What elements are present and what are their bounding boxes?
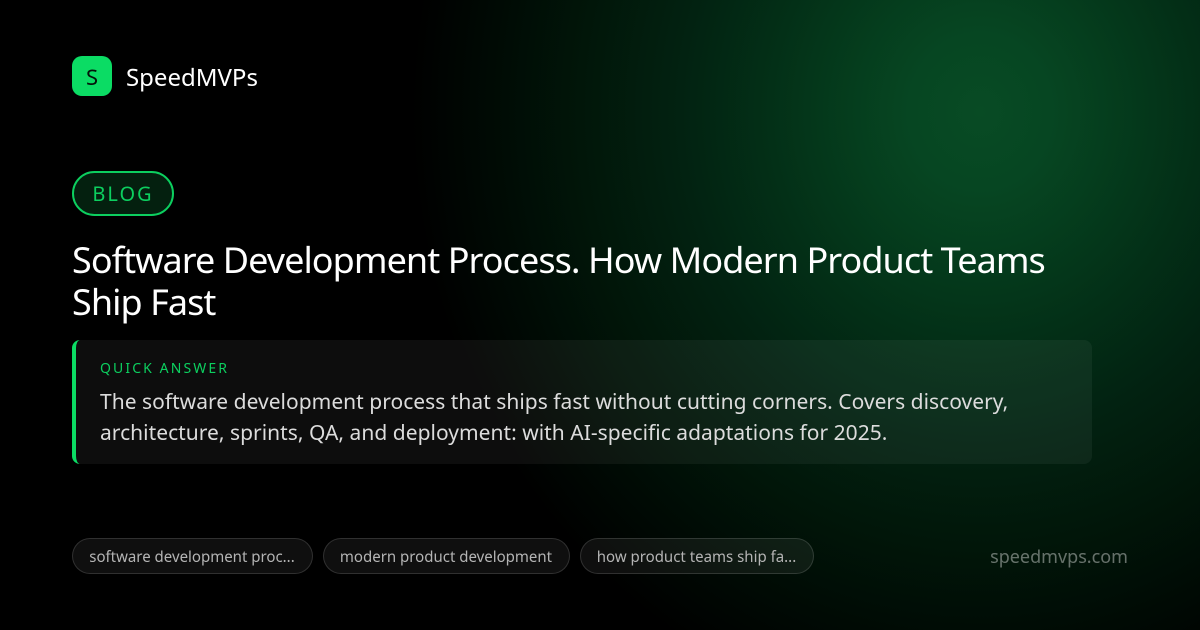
tag 1	[72, 538, 313, 574]
tag 2: modern product development	[340, 547, 552, 567]
panel: quick answer	[72, 340, 1092, 464]
answer text: architecture, sprints, QA, and deployment: with AI-specific adaptations for 2025.	[100, 419, 887, 447]
tag 3: how product teams ship fa...	[597, 547, 796, 567]
title: Ship Fast	[72, 277, 215, 326]
tag 1: software development proc...	[89, 547, 295, 567]
answer text: The software development process that ships fast without cutting corners. Covers discovery,	[100, 388, 1008, 416]
badge: blog: BLOG	[92, 180, 154, 207]
tag 3	[580, 538, 814, 574]
site url: speedmvps.com	[990, 545, 1128, 569]
title: Software Development Process. How Modern Product Teams	[72, 235, 1045, 284]
icon: logo square: S	[86, 62, 98, 92]
answer text	[100, 388, 1008, 447]
logo	[72, 56, 258, 96]
label: QUICK ANSWER	[100, 359, 229, 378]
brand name: SpeedMVPs	[126, 61, 258, 94]
title	[72, 235, 1045, 326]
tags	[72, 538, 814, 574]
tag 2	[323, 538, 570, 574]
icon: logo square	[72, 56, 112, 96]
badge: blog	[72, 171, 174, 216]
